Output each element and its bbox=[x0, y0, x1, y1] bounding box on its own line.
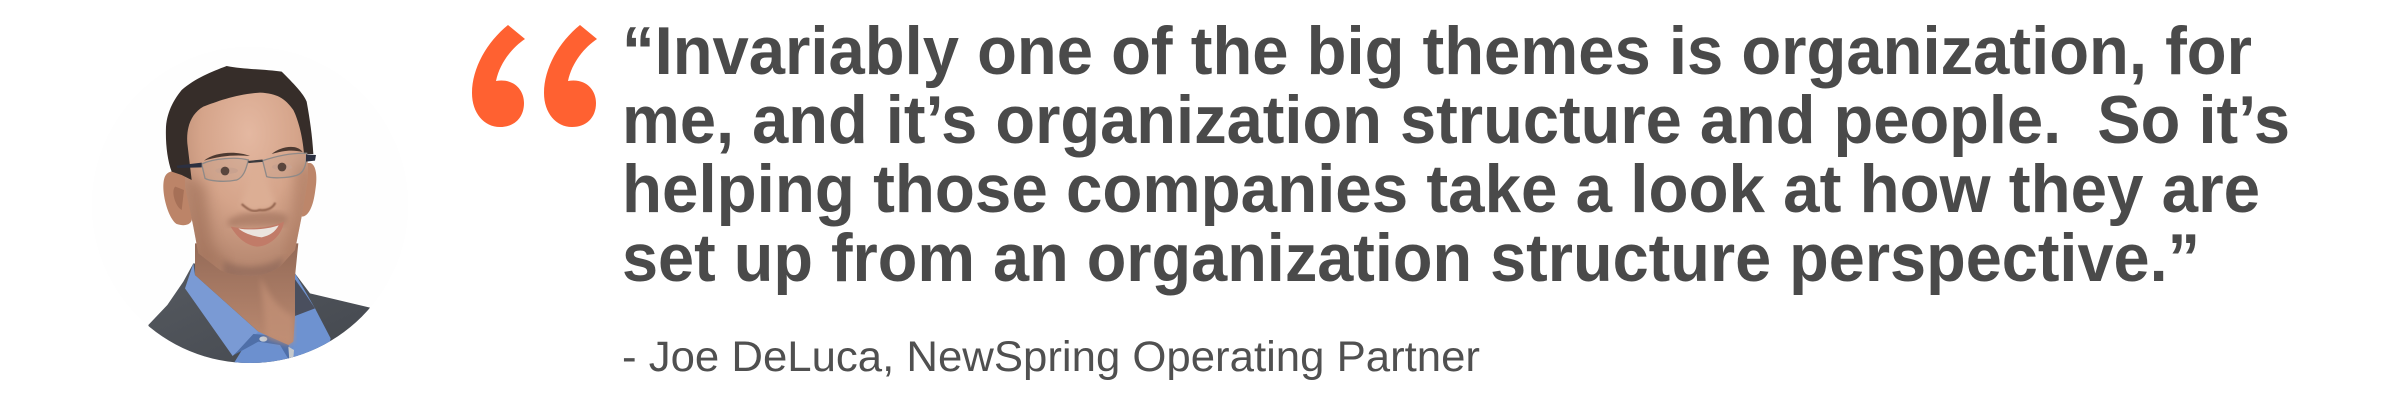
smile bbox=[231, 222, 284, 247]
eyes bbox=[215, 163, 292, 175]
quote text: helping those companies take a look at how they are bbox=[622, 151, 2260, 227]
glasses bbox=[177, 153, 316, 181]
neck bbox=[195, 243, 298, 345]
quote text: “Invariably one of the big themes is organization, for bbox=[622, 13, 2252, 89]
portrait photo bbox=[148, 66, 370, 363]
ears bbox=[163, 163, 316, 225]
eyebrows bbox=[204, 147, 303, 161]
quotation mark icon bbox=[472, 25, 597, 127]
quote text: me, and it’s organization structure and people. So it’s bbox=[622, 82, 2290, 158]
face bbox=[185, 84, 308, 276]
shirt and collar bbox=[185, 263, 333, 367]
jacket bbox=[148, 263, 370, 367]
quote text bbox=[622, 13, 2290, 296]
attribution: - Joe DeLuca, NewSpring Operating Partner bbox=[622, 333, 1480, 381]
hair bbox=[166, 66, 313, 180]
facial shading bbox=[183, 163, 313, 278]
nose bbox=[241, 163, 275, 211]
quote card bbox=[148, 25, 2288, 380]
quote text: set up from an organization structure perspective.” bbox=[622, 220, 2200, 296]
